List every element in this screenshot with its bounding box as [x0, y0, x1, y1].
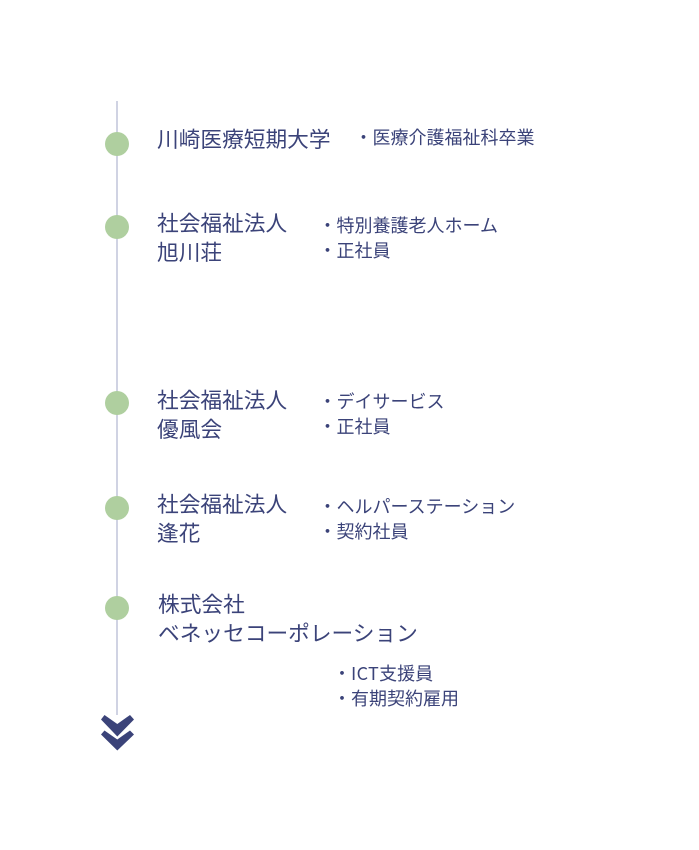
heading: 優風会: 社会福祉法人 [157, 384, 287, 414]
details: 旭川荘 [318, 212, 498, 262]
timeline line [116, 101, 118, 715]
details: 逢花: ・契約社員 [318, 518, 408, 544]
details: 旭川荘: ・特別養護老人ホーム [318, 212, 498, 238]
timeline dot: 逢花 [105, 496, 129, 520]
details: 優風会 [318, 388, 444, 438]
heading: 優風会 [157, 384, 287, 444]
details: 優風会: ・デイサービス [318, 388, 444, 414]
heading: 川崎医療短期大学: 川崎医療短期大学 [157, 123, 331, 154]
heading: ベネッセコーポレーション: ベネッセコーポレーション [158, 617, 418, 648]
details: ベネッセコーポレーション [333, 660, 459, 711]
heading: ベネッセコーポレーション [158, 588, 418, 648]
details: 川崎医療短期大学: ・医療介護福祉科卒業 [354, 124, 534, 150]
timeline dot: 優風会 [105, 391, 129, 415]
timeline dot: 川崎医療短期大学 [105, 132, 129, 156]
heading: 逢花: 逢花 [157, 517, 200, 548]
details: 旭川荘: ・正社員 [318, 236, 390, 262]
heading: ベネッセコーポレーション: 株式会社 [158, 588, 245, 619]
heading: 逢花 [157, 488, 287, 548]
heading: 旭川荘: 社会福祉法人 [157, 207, 287, 238]
heading: 旭川荘: 旭川荘 [157, 236, 222, 267]
details: ベネッセコーポレーション: ・ICT支援員 [333, 660, 433, 686]
details: 優風会: ・正社員 [318, 412, 390, 438]
heading: 優風会: 優風会 [157, 412, 222, 444]
heading: 逢花: 社会福祉法人 [157, 488, 287, 519]
details: 逢花: ・ヘルパーステーション [318, 492, 515, 518]
details: ベネッセコーポレーション: ・有期契約雇用 [333, 685, 459, 711]
heading: 旭川荘 [157, 207, 287, 267]
timeline dot: ベネッセコーポレーション [105, 596, 129, 620]
timeline dot: 旭川荘 [105, 214, 129, 238]
icon: double chevron down arrow [101, 715, 134, 750]
details: 逢花 [318, 492, 515, 544]
